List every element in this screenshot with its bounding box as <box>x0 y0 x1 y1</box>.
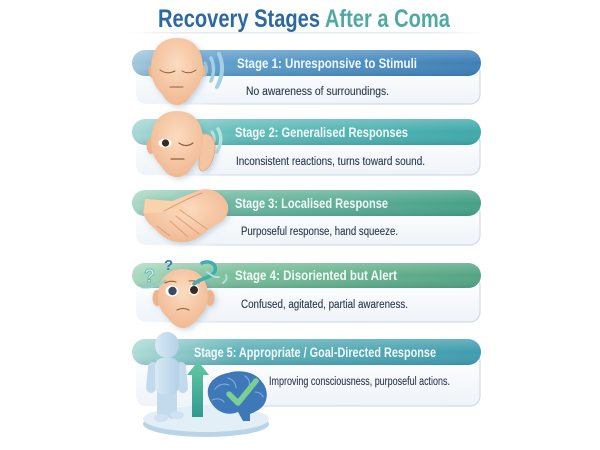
stage 4 heading: Stage 4: Disoriented but Alert <box>235 267 397 283</box>
stage 1 description: No awareness of surroundings. <box>246 86 389 98</box>
panel: stage 4 <box>132 257 481 328</box>
panel: stage 2 <box>132 111 481 177</box>
description card 5 <box>136 352 480 406</box>
description card 1 <box>136 62 480 104</box>
icon: sound waves 1 <box>205 54 222 87</box>
icon: face with one eye open <box>146 111 215 177</box>
icon: platform <box>143 406 269 437</box>
description card 4 <box>136 275 480 322</box>
icon: person figure <box>151 332 184 422</box>
stage 4 description: Confused, agitated, partial awareness. <box>241 299 408 311</box>
stage 3 description: Purposeful response, hand squeeze. <box>241 226 398 238</box>
icon: blue brain with check <box>208 371 267 421</box>
stage 3 heading: Stage 3: Localised Response <box>235 195 388 211</box>
icon: question marks and swirls: ? <box>144 266 155 286</box>
description card 2 <box>136 132 480 175</box>
panel: stage 5 <box>132 332 481 437</box>
stage 2 heading: Stage 2: Generalised Responses <box>235 124 408 140</box>
header bar 2 <box>132 119 481 145</box>
title: Recovery Stages After a Coma <box>158 5 451 33</box>
stage 5 description: Improving consciousness, purposeful actions. <box>269 376 450 388</box>
header bar 1 <box>132 50 481 76</box>
description card 3 <box>136 203 480 245</box>
panel: stage 1 <box>132 38 481 105</box>
stage 5 heading: Stage 5: Appropriate / Goal-Directed Response <box>194 344 436 360</box>
icon: sound waves 2 <box>212 129 221 152</box>
icon: question marks and swirls <box>141 257 227 287</box>
icon: question marks and swirls: ? <box>164 257 173 274</box>
panel: stage 3 <box>132 189 481 245</box>
header bar 4 <box>132 263 481 288</box>
icon: green up arrow <box>187 361 209 417</box>
stage 1 heading: Stage 1: Unresponsive to Stimuli <box>237 55 417 71</box>
header bar 3 <box>132 190 481 216</box>
stage 2 description: Inconsistent reactions, turns toward sound. <box>236 156 425 168</box>
header bar 5 <box>132 339 481 365</box>
icon: confused face <box>152 269 214 328</box>
icon: handshake <box>143 189 228 242</box>
icon: sleeping face <box>148 38 206 105</box>
